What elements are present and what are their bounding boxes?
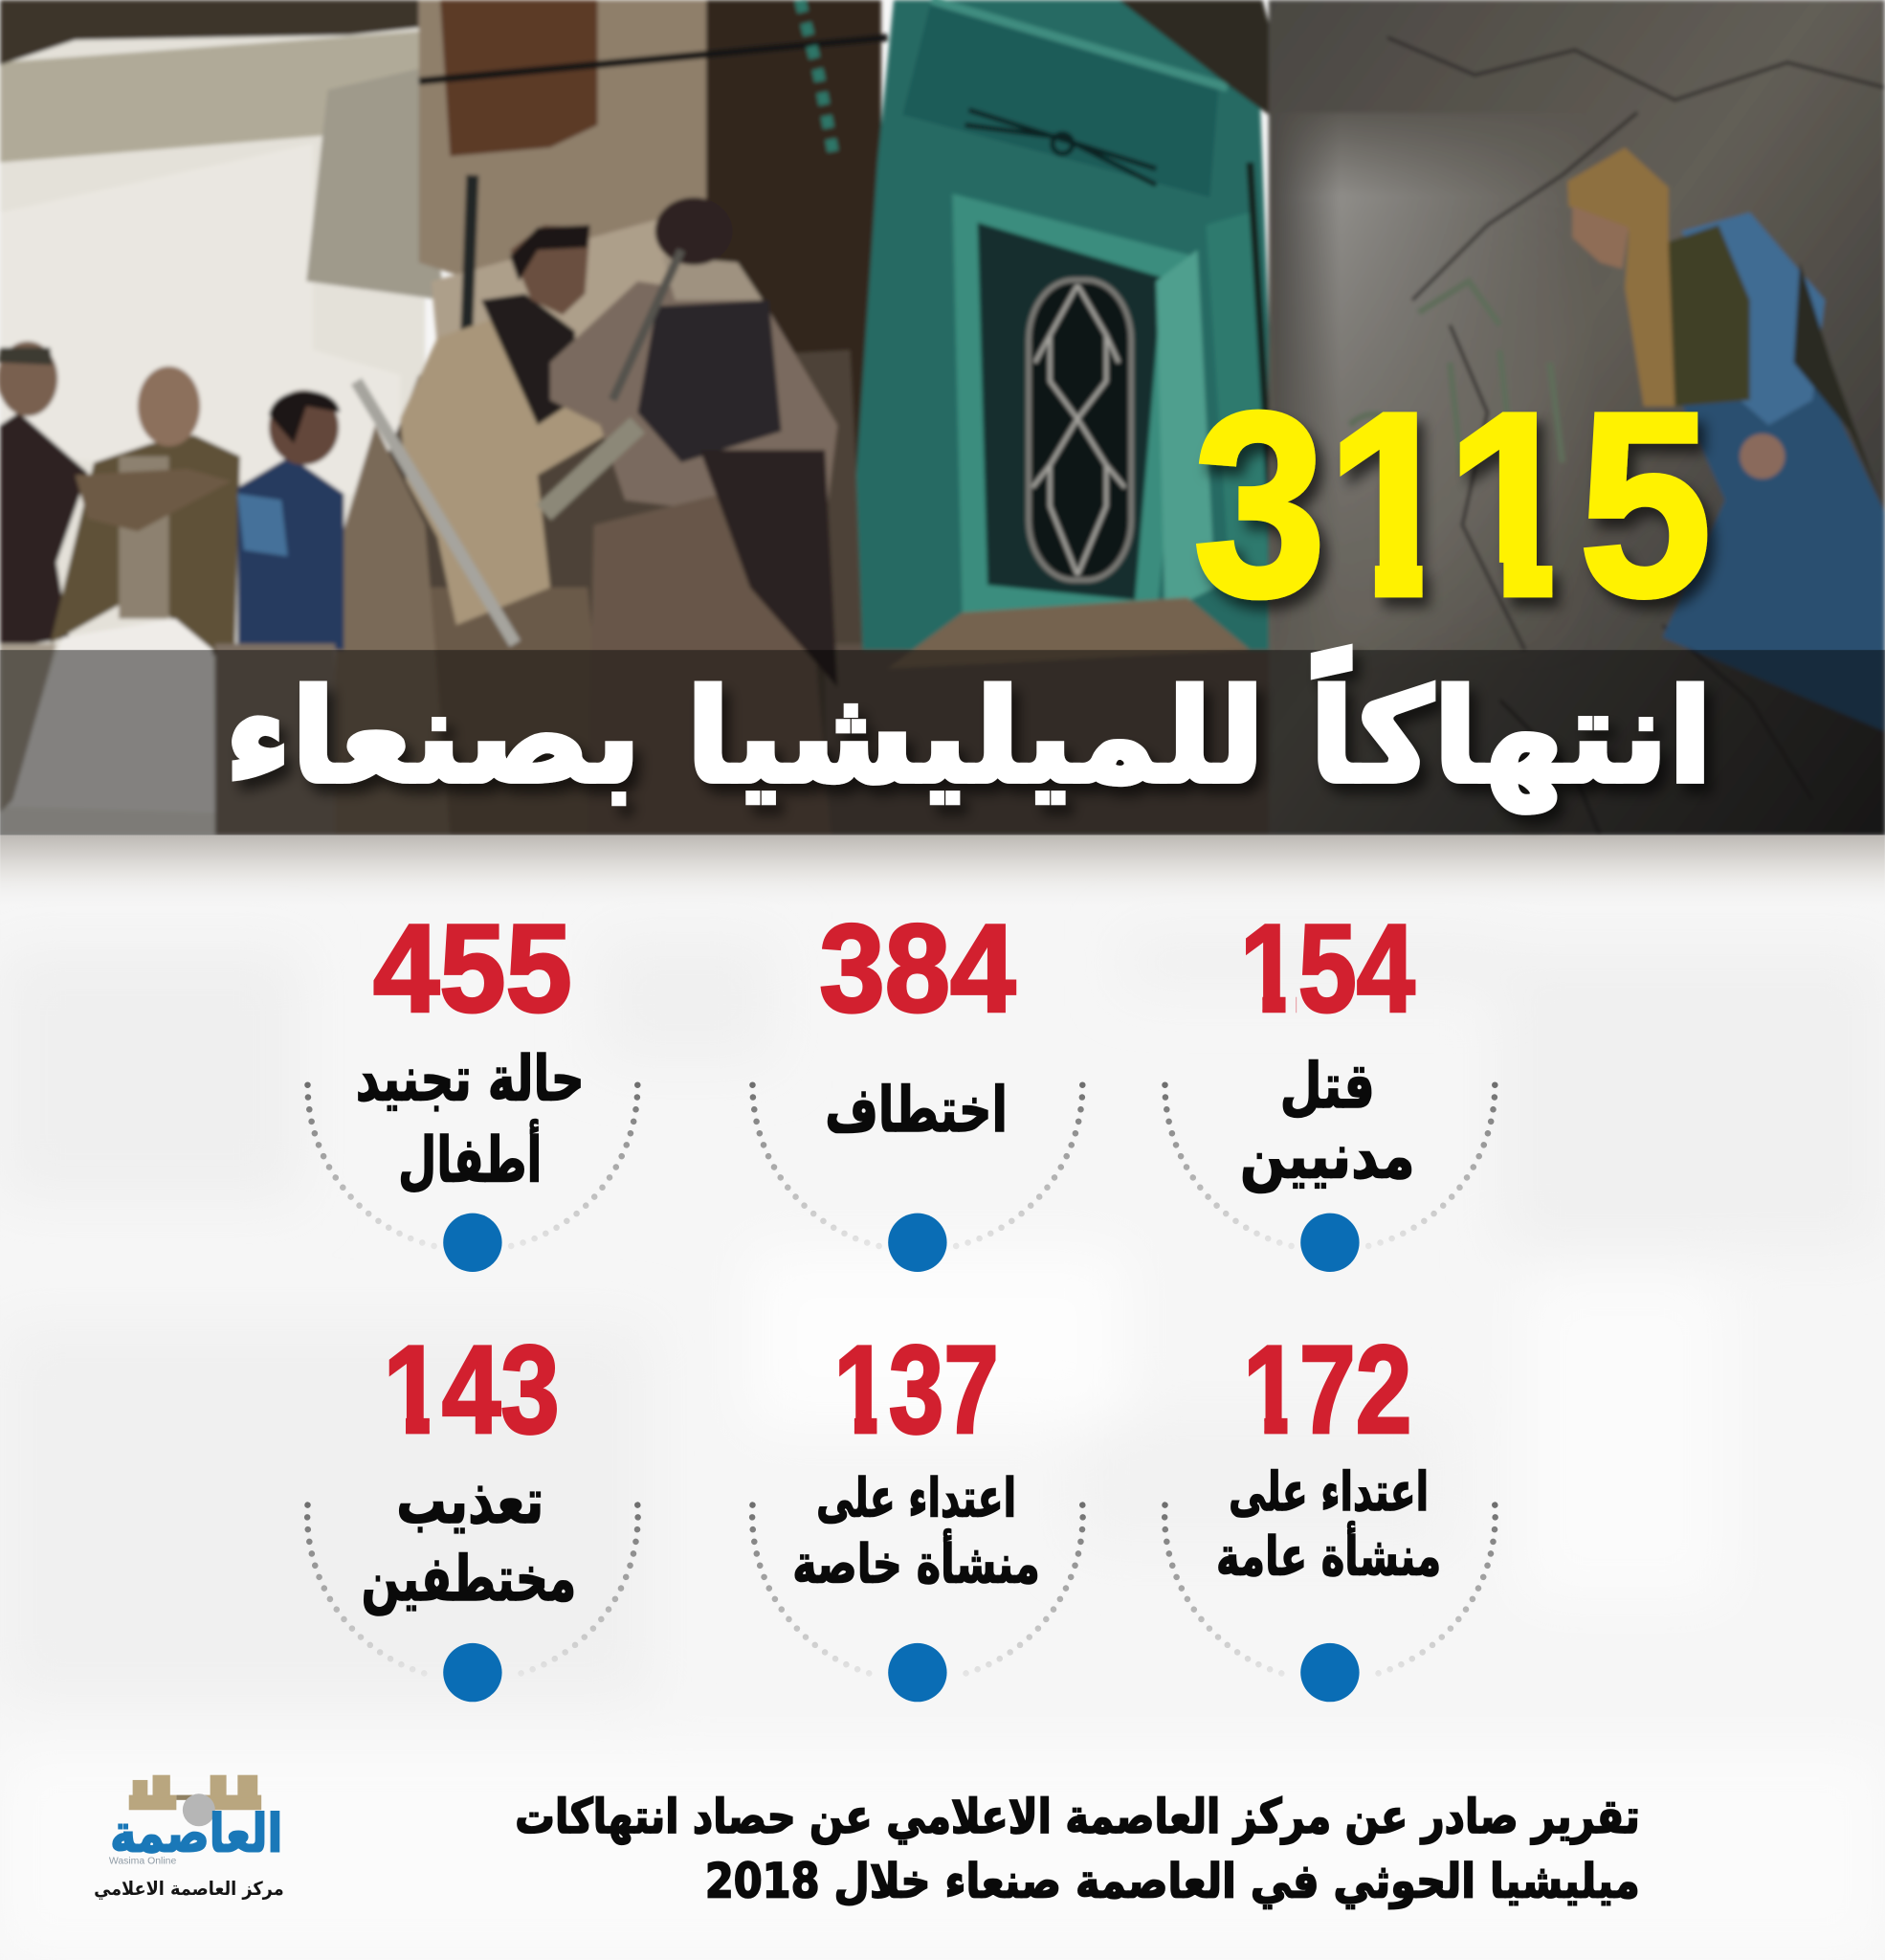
blue dot — [443, 1643, 502, 1702]
dark mass behind soldiers — [335, 350, 875, 835]
rifle on woman's back — [1793, 262, 1881, 500]
house stonework — [432, 207, 738, 375]
teal lintel light edge — [931, 0, 1228, 87]
label: قتل — [1280, 1050, 1375, 1123]
fade under the photo — [0, 835, 1885, 910]
value: 455 — [373, 899, 572, 1038]
blue dot — [888, 1643, 947, 1702]
stat: 143 torture of abductees — [307, 1320, 638, 1702]
teal door frame — [856, 0, 1281, 650]
globe — [183, 1793, 215, 1826]
stat: 455 child recruitment — [307, 899, 637, 1272]
man 2: head — [138, 367, 200, 446]
line 2: ميليشيا الحوثي في العاصمة صنعاء خلال 2018 — [705, 1854, 1640, 1910]
logo caption: مركز العاصمة الاعلامي — [94, 1878, 284, 1900]
value: 143 — [384, 1320, 560, 1459]
blue dot — [1300, 1643, 1360, 1702]
stat: 154 killed civilians — [1164, 899, 1495, 1272]
soldier 2: strap rifle — [612, 250, 681, 400]
report description text — [515, 1789, 1640, 1910]
window — [1029, 280, 1131, 580]
soldier 1: head — [510, 225, 590, 315]
iron rod — [419, 37, 888, 81]
window lattice — [1032, 285, 1125, 575]
dotted arc — [1164, 1505, 1496, 1677]
soldier 2: armor vest — [637, 300, 782, 462]
dark lower centre base — [825, 644, 1275, 835]
door recess frame — [952, 193, 1194, 619]
woman: vest — [1662, 225, 1750, 406]
dark title band — [0, 650, 1885, 835]
AK rifle — [356, 381, 515, 644]
man far left — [0, 412, 88, 650]
soldier 1: jacket — [400, 319, 625, 625]
stat: 384 kidnapping — [752, 899, 1082, 1272]
door recess dark — [978, 222, 1163, 600]
left white wall — [0, 0, 425, 835]
logo english tag: Wasima Online — [109, 1856, 176, 1866]
right towers — [207, 1775, 261, 1810]
line 1: تقرير صادر عن مركز العاصمة الاعلامي عن حصاد انتهاكات — [515, 1789, 1640, 1845]
soldier 2: gun barrel — [543, 425, 637, 513]
label line 2: مدنيين — [1240, 1120, 1415, 1192]
dark gap in post — [1250, 163, 1277, 600]
dark side wall of building — [700, 0, 881, 835]
teal side post — [1207, 212, 1269, 600]
woman: hand — [1740, 434, 1785, 479]
man 2: jacket — [50, 435, 240, 662]
iron ornament on panel — [965, 110, 1156, 185]
label: اختطاف — [825, 1074, 1008, 1147]
dotted arc — [752, 1505, 1083, 1677]
woman: dress — [1662, 363, 1885, 731]
big number 3115: 3115 — [1193, 359, 1712, 652]
dotted arc — [307, 1085, 637, 1246]
pole — [465, 175, 473, 375]
dark gun strap — [700, 450, 837, 687]
right cracked wall — [1269, 0, 1885, 835]
man 3: hair — [269, 390, 340, 444]
woman: scarf — [1567, 147, 1674, 406]
stone pillar — [306, 69, 444, 300]
house front — [419, 0, 713, 281]
dotted arc — [307, 1505, 638, 1677]
soldier 2: trousers — [588, 475, 832, 835]
value: 137 — [833, 1320, 999, 1459]
man behind rifle — [331, 425, 450, 835]
man far left head — [0, 342, 57, 416]
photo: militia men in Sanaa street — [0, 0, 1885, 835]
background blotches — [0, 938, 1885, 1960]
soldier 1: cap — [510, 225, 590, 281]
connector — [176, 1795, 207, 1800]
soldier 1: scarf — [481, 294, 575, 425]
lower left ground — [0, 644, 56, 813]
brown wooden window — [440, 0, 598, 156]
man far left cap — [0, 347, 53, 365]
label line 2: أطفال — [398, 1119, 542, 1196]
soldier 1: trousers — [412, 588, 612, 835]
logo: Al-Asima media center — [94, 1775, 284, 1900]
wall cracks — [1387, 37, 1885, 835]
man 2: shirt and dagger — [119, 457, 169, 619]
blue dot — [888, 1214, 947, 1272]
man 3: shirt — [237, 457, 344, 650]
value: 154 — [1240, 899, 1415, 1038]
block wall at the top — [0, 32, 419, 163]
woman: face — [1572, 207, 1629, 269]
man 3: skirt — [215, 644, 335, 835]
label: اعتداء على — [816, 1467, 1016, 1529]
stat: 172 attacks on public facility — [1164, 1320, 1496, 1702]
label line 2: منشأة خاصة — [792, 1529, 1040, 1596]
blue dot — [443, 1214, 502, 1272]
soldier 2: shawl — [662, 256, 763, 300]
blue dot — [1300, 1214, 1360, 1272]
green bunting — [800, 0, 835, 163]
label: تعذيب — [396, 1465, 543, 1538]
soldier 2: head — [655, 197, 733, 265]
dark thorny top strip — [0, 0, 419, 65]
value: 384 — [819, 899, 1015, 1038]
white wall highlight — [0, 144, 400, 500]
woman: sleeve and torso — [1681, 212, 1825, 425]
graffiti — [1350, 281, 1563, 475]
wall glow — [1282, 113, 1560, 591]
man 2: arms — [76, 469, 232, 531]
soldier 2: arm and shirt — [550, 281, 837, 525]
label: حالة تجنيد — [356, 1042, 585, 1115]
stat: 137 attacks on private facility — [752, 1320, 1083, 1702]
teal door top panel — [902, 0, 1219, 197]
logo wordmark: العاصمة — [110, 1802, 282, 1863]
man 3: head — [269, 390, 339, 465]
left towers — [129, 1775, 176, 1810]
man 3: shirt highlight — [237, 494, 288, 556]
dotted arc — [752, 1085, 1082, 1246]
dotted arc — [1164, 1085, 1495, 1246]
light teal shutter — [1156, 250, 1215, 612]
sill — [888, 597, 1250, 669]
main title: انتهاكاً للميليشيا بصنعاء — [225, 647, 1713, 813]
label line 2: منشأة عامة — [1216, 1522, 1441, 1589]
man 2: white robe — [7, 619, 215, 813]
top-right dark carved corner — [1119, 0, 1300, 138]
value: 172 — [1243, 1320, 1411, 1459]
label: اعتداء على — [1229, 1461, 1429, 1524]
label line 2: مختطفين — [362, 1543, 576, 1615]
